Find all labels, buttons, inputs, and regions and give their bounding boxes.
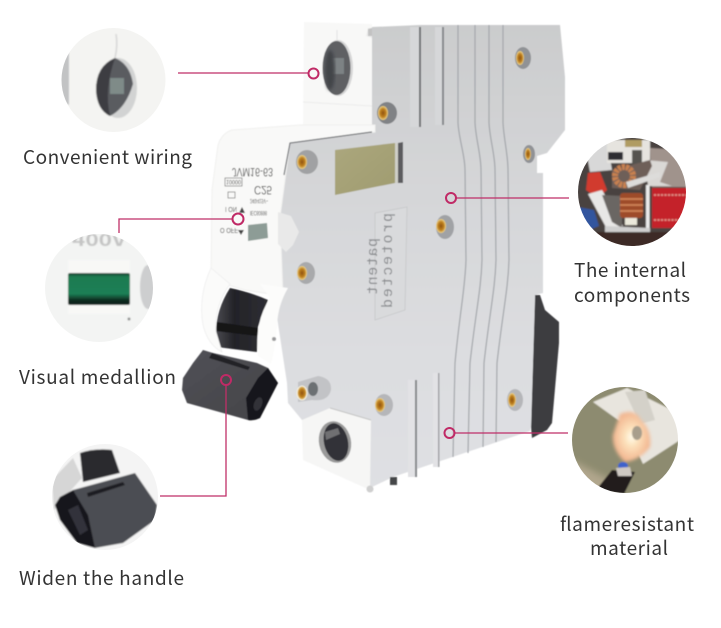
label: Widen the handle (19, 564, 184, 591)
marker (232, 214, 244, 224)
rating label print: 10000 (226, 178, 242, 184)
callout: visual medallion (19, 214, 244, 390)
label: Convenient wiring (23, 143, 192, 170)
rating label print: JVM16-63 (232, 165, 273, 179)
embossed protected patent plate (365, 207, 407, 320)
rating label print: O OFF (220, 226, 238, 233)
label (560, 510, 694, 561)
grip (182, 350, 278, 420)
photo: indicator close-up (45, 234, 153, 342)
marker (308, 68, 318, 78)
leader line (455, 432, 568, 434)
status indicator (248, 223, 268, 241)
rating label print: I ON (225, 205, 237, 212)
embossed protected patent plate: patent (365, 238, 382, 295)
label (574, 256, 690, 308)
callout: widen the handle (19, 375, 231, 591)
callout: flame resistant material (444, 385, 694, 561)
din rail clip (531, 295, 559, 438)
rating label print: C25 (254, 183, 272, 197)
label: flameresistant (560, 510, 694, 537)
rating label print: 240/415V~ (250, 197, 268, 203)
callout: internal components (446, 136, 690, 308)
leader line (178, 72, 308, 74)
vertical slots (408, 27, 444, 477)
rating label print (220, 165, 273, 235)
leader line (160, 385, 226, 496)
marker (446, 193, 456, 203)
callout: convenient wiring (23, 26, 318, 170)
pivot drum (216, 288, 268, 352)
photo: terminal close-up (60, 26, 168, 136)
marker (221, 375, 231, 385)
rivets (296, 47, 535, 416)
photo: flame test (572, 387, 678, 493)
product window (335, 142, 403, 195)
bottom terminal block (302, 408, 397, 492)
label: components (574, 281, 690, 308)
rating label print: IEC60898 (250, 209, 267, 215)
circuit breaker product photo (182, 22, 565, 492)
white front module (211, 125, 375, 296)
housing grooves (453, 25, 509, 457)
embossed protected patent plate: protected (380, 213, 397, 308)
white guard arms (202, 268, 230, 352)
photo: handle close-up (50, 442, 160, 552)
label: material (590, 534, 668, 561)
photo: cutaway interior (576, 136, 688, 248)
top terminal block (303, 22, 402, 130)
leader line (119, 219, 233, 233)
label: The internal (574, 256, 686, 283)
grey housing (277, 25, 565, 488)
leader line (456, 197, 569, 199)
label: Visual medallion (19, 363, 176, 390)
black toggle handle (182, 268, 288, 420)
photo: indicator close-up: 400V (72, 226, 127, 251)
marker (444, 428, 454, 438)
